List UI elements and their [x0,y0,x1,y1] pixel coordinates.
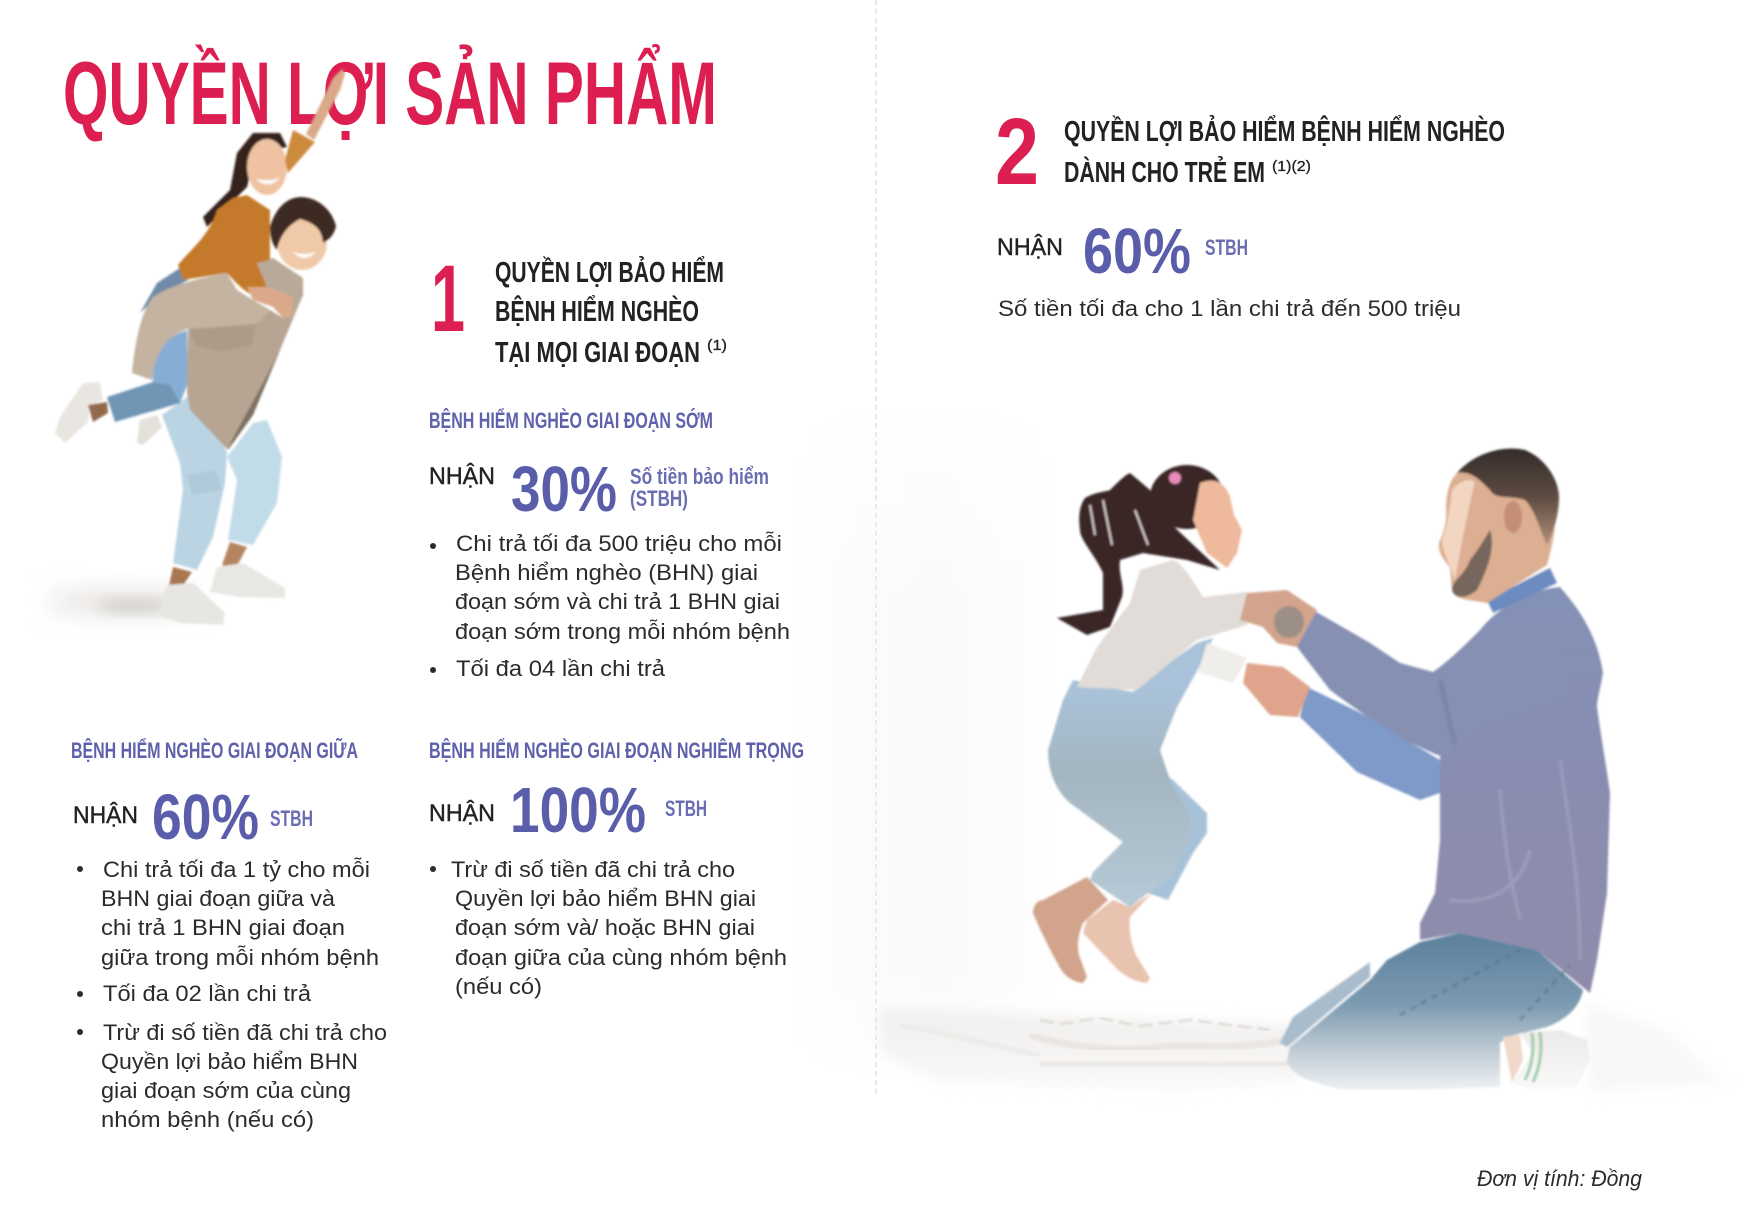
block: middle stage: giữa trong mỗi nhóm bệnh [101,945,379,970]
man sock [1513,1030,1590,1092]
woman hair, face, orange top [178,130,315,318]
block: early stage [429,408,790,681]
heading 1: TẠI MỌI GIAI ĐOẠN [495,337,700,369]
heading 2: QUYỀN LỢI BẢO HIỂM BỆNH HIỂM NGHÈO [1064,114,1505,148]
page divider [875,0,877,1095]
girl feet [1033,877,1108,983]
block: child benefit: Số tiền tối đa cho 1 lần chi trả đến 500 triệu [998,296,1461,321]
block: severe stage: đoạn sớm và/ hoặc BHN giai [455,915,755,940]
block: severe stage: NHẬN [429,800,495,827]
block: severe stage: (nếu có) [455,974,542,999]
block: middle stage: BHN giai đoạn giữa và [101,886,336,911]
block: child benefit [997,215,1461,321]
block: middle stage: BỆNH HIỂM NGHÈO GIAI ĐOẠN GIỮA [71,738,358,763]
block: middle stage [71,738,387,1132]
man shirt body [1420,587,1610,993]
block: early stage: Chi trả tối đa 500 triệu cho mỗi [456,531,782,556]
photo: couple piggyback [45,69,345,625]
heading 1 [431,246,727,369]
woman raised forearm [306,69,345,140]
man jeans [1280,962,1370,1047]
heading 1: BỆNH HIỂM NGHÈO [495,294,699,328]
man head [270,197,336,270]
block: middle stage: Tối đa 02 lần chi trả [103,981,312,1006]
title: QUYỀN LỢI SẢN PHẨM [63,43,717,143]
sneakers [55,382,285,625]
block: middle stage: giai đoạn sớm của cùng [101,1078,351,1103]
block: early stage: đoạn sớm trong mỗi nhóm bệnh [455,619,790,644]
man lower arm [1300,687,1440,800]
block: early stage: Bệnh hiểm nghèo (BHN) giai [455,560,758,585]
block: middle stage: nhóm bệnh (nếu có) [101,1107,314,1132]
block: child benefit: STBH [1205,235,1248,260]
man head [1487,568,1557,613]
man upper arm [1297,610,1574,757]
block: severe stage: BỆNH HIỂM NGHÈO GIAI ĐOẠN NGHIÊM TRỌNG [429,738,804,763]
man legs [162,397,282,590]
heading 1: 1 [431,246,465,352]
photo: father and daughter [1033,448,1610,1092]
block: middle stage: 60% [152,781,259,853]
block: early stage: (STBH) [630,486,688,511]
heading 2: (1)(2) [1272,158,1311,175]
background: curtain and bedding [790,400,1725,1100]
girl hair and face [1150,465,1224,529]
woman jeans [107,268,188,422]
heading 2: DÀNH CHO TRẺ EM [1064,155,1265,189]
block: early stage: 30% [511,453,617,525]
heading 1: QUYỀN LỢI BẢO HIỂM [495,255,724,289]
block: early stage: NHẬN [429,463,495,490]
block: severe stage: 100% [510,774,646,846]
heading 2 [995,99,1505,205]
girl back leg and overalls [1143,760,1207,900]
block: child benefit: NHẬN [997,234,1063,261]
heading 2: 2 [995,99,1039,205]
block: middle stage: STBH [270,806,313,831]
girl top [1077,560,1247,690]
man shirt [132,258,303,450]
block: early stage: BỆNH HIỂM NGHÈO GIAI ĐOẠN SỚM [429,408,713,433]
block: early stage: Số tiền bảo hiểm [630,464,769,489]
block: severe stage: STBH [665,796,707,821]
block: severe stage: Quyền lợi bảo hiểm BHN giai [455,886,756,911]
block: middle stage: chi trả 1 BHN giai đoạn [101,915,345,940]
block: middle stage: Trừ đi số tiền đã chi trả cho [103,1020,387,1045]
unit note: Đơn vị tính: Đồng [1477,1166,1643,1191]
block: early stage: đoạn sớm và chi trả 1 BHN giai [455,589,780,614]
block: severe stage: đoạn giữa của cùng nhóm bệnh [455,945,787,970]
block: severe stage [429,738,804,999]
heading 1: (1) [707,337,727,354]
block: middle stage: NHẬN [73,802,138,829]
block: child benefit: 60% [1083,215,1191,287]
block: middle stage: Chi trả tối đa 1 tỷ cho mỗi [103,857,370,882]
block: severe stage: Trừ đi số tiền đã chi trả cho [451,857,735,882]
clasped hands [1240,590,1317,647]
block: early stage: Tối đa 04 lần chi trả [456,656,666,681]
block: middle stage: Quyền lợi bảo hiểm BHN [101,1049,358,1074]
